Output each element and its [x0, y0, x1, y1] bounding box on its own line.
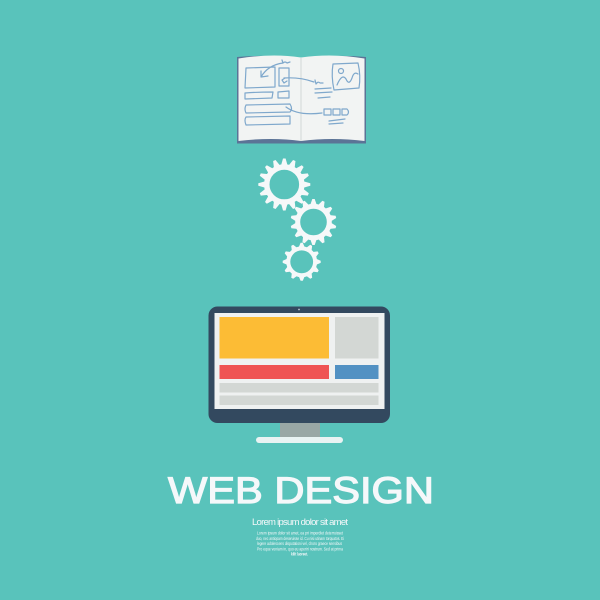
body text: kilit laoreet.	[291, 552, 308, 556]
monitor stand	[280, 422, 320, 437]
icon: desktop monitor	[208, 306, 390, 443]
left page sketches	[245, 60, 292, 125]
monitor base	[256, 437, 343, 443]
icon: medium gear	[290, 199, 337, 245]
title: WEB DESIGN	[168, 470, 434, 511]
body text: Pro eque veniam in, quo eu aperiri nostrum. Sed at prima	[257, 546, 344, 551]
subtitle: Lorem ipsum dolor sit amet	[252, 517, 348, 528]
red bar	[220, 365, 329, 379]
body text: Lorem ipsum dolor sit amet, ea pri imperdiet deterruisset	[257, 530, 344, 536]
right page sketches	[284, 63, 360, 124]
book pages	[238, 55, 364, 141]
grey sidebar block	[335, 317, 378, 358]
body text	[256, 530, 344, 556]
blue button	[335, 365, 378, 379]
grey content row 2	[220, 396, 378, 405]
grey content row 1	[220, 383, 378, 392]
body text: duo, nec antiopam deseruisse id. Cu nisi utinam torquatos. Ei	[256, 536, 344, 541]
yellow hero block	[220, 317, 329, 358]
body text: legere adolescens disputationi vel, choro graece sensibus	[257, 541, 342, 546]
icon: open sketch book	[237, 55, 366, 144]
screen	[214, 313, 384, 409]
book spine shading	[300, 58, 302, 141]
icon: large gear	[258, 158, 310, 210]
camera dot	[298, 309, 300, 310]
monitor body	[208, 306, 390, 423]
book cover	[237, 56, 366, 144]
icon: small gear	[283, 243, 321, 281]
